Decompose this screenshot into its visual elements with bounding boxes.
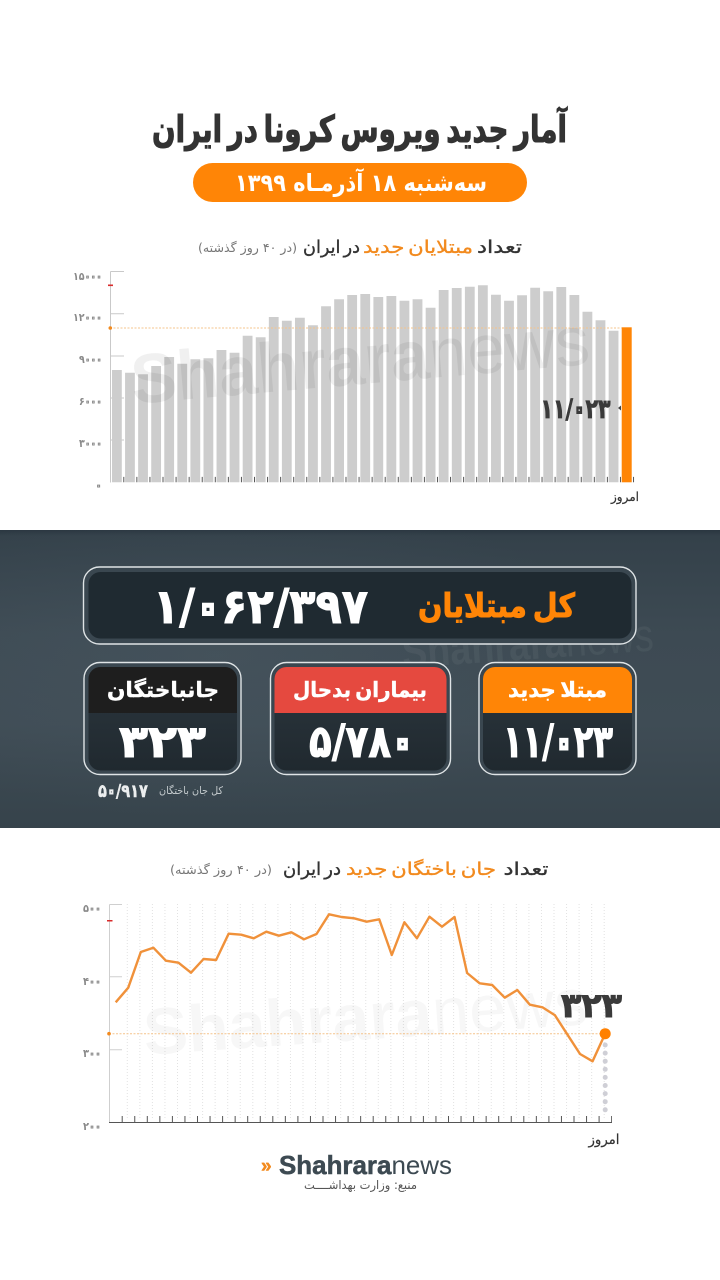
total deaths caption: ۵۰/۹۱۷ xyxy=(98,781,148,802)
y axis labels: ۳۰۰ xyxy=(83,1047,101,1060)
deaths heading: جانباختگان xyxy=(107,677,219,702)
logo chevrons: » xyxy=(261,1156,272,1177)
line chart: new deaths xyxy=(83,902,622,1148)
heading: new deaths chart: در ایران xyxy=(283,859,341,880)
dark stats panel xyxy=(0,530,720,828)
y axis labels: ۱۲۰۰۰ xyxy=(73,311,102,324)
today label: امروز xyxy=(610,489,639,505)
critical patients value: ۵/۷۸۰ xyxy=(309,715,414,768)
value label: today: ۱۱/۰۲۳ xyxy=(540,394,611,425)
total cases label: کل مبتلایان xyxy=(418,586,576,625)
y axis with ticks xyxy=(110,272,124,482)
logo and source xyxy=(261,1150,452,1193)
data line xyxy=(116,914,605,1061)
y axis labels: ۴۰۰ xyxy=(83,975,101,988)
y axis labels: ۳۰۰۰ xyxy=(79,437,102,450)
heading: new cases chart xyxy=(198,237,522,258)
new cases value: ۱۱/۰۲۳ xyxy=(503,715,613,768)
today point xyxy=(600,1028,611,1039)
total deaths caption xyxy=(98,781,223,802)
page title: آمار جدید ویروس کرونا در ایران xyxy=(152,106,568,151)
y axis labels: ۰ xyxy=(95,479,102,492)
date pill: سه‌شنبه ۱۸ آذرمـاه ۱۳۹۹ xyxy=(235,168,487,197)
total cases value: ۱/۰۶۲/۳۹۷ xyxy=(153,579,368,635)
y axis labels: ۵۰۰ xyxy=(83,902,101,915)
y axis labels: ۹۰۰۰ xyxy=(79,353,102,366)
red max marker xyxy=(108,284,113,286)
heading: new deaths chart: جان باختگان جدید xyxy=(346,858,496,880)
y axis labels xyxy=(73,270,102,492)
today label: امروز xyxy=(588,1132,620,1148)
red max marker xyxy=(107,920,112,922)
watermark: Shahraranews xyxy=(128,301,593,419)
baseline ticks xyxy=(123,477,636,482)
total deaths caption: کل جان باختگان xyxy=(159,784,223,797)
heading: new cases chart: مبتلایان جدید xyxy=(363,237,473,258)
logo wordmark: Shahraranews xyxy=(279,1150,452,1180)
dotted drop line xyxy=(603,1045,608,1112)
watermark: Shahraranews xyxy=(141,964,590,1069)
new cases heading: مبتلا جدید xyxy=(508,678,607,702)
panel watermark: Shahraranews xyxy=(400,609,655,678)
today reference line xyxy=(107,1032,600,1035)
card: new cases xyxy=(479,662,636,774)
y axis labels xyxy=(83,902,101,1133)
date pill xyxy=(193,163,527,202)
card: critical patients xyxy=(270,662,450,774)
value label: today: ۳۲۳ xyxy=(561,986,622,1026)
axes xyxy=(110,904,122,1122)
heading: new deaths chart: (در ۴۰ روز گذشته) xyxy=(170,862,272,878)
heading: new cases chart: تعداد xyxy=(477,237,522,258)
deaths value: ۳۲۳ xyxy=(119,715,206,768)
y axis labels: ۲۰۰ xyxy=(83,1120,101,1133)
card: deaths xyxy=(84,662,241,774)
source: منبع: وزارت بهداشــــت xyxy=(304,1178,417,1193)
bar chart: new cases xyxy=(73,270,639,505)
today bar xyxy=(622,327,632,482)
heading: new deaths chart xyxy=(170,858,548,880)
y axis labels: ۱۵۰۰۰ xyxy=(73,270,102,283)
card: total cases xyxy=(84,567,636,644)
baseline xyxy=(109,1119,612,1122)
gray daily bars xyxy=(112,285,618,482)
critical patients heading: بیماران بدحال xyxy=(293,678,427,702)
heading: new cases chart: در ایران xyxy=(303,237,360,258)
today reference line xyxy=(108,326,622,330)
y axis labels: ۶۰۰۰ xyxy=(79,395,102,408)
vertical dotted grid xyxy=(127,904,604,1118)
heading: new deaths chart: تعداد xyxy=(504,859,548,880)
heading: new cases chart: (در ۴۰ روز گذشته) xyxy=(198,240,297,256)
